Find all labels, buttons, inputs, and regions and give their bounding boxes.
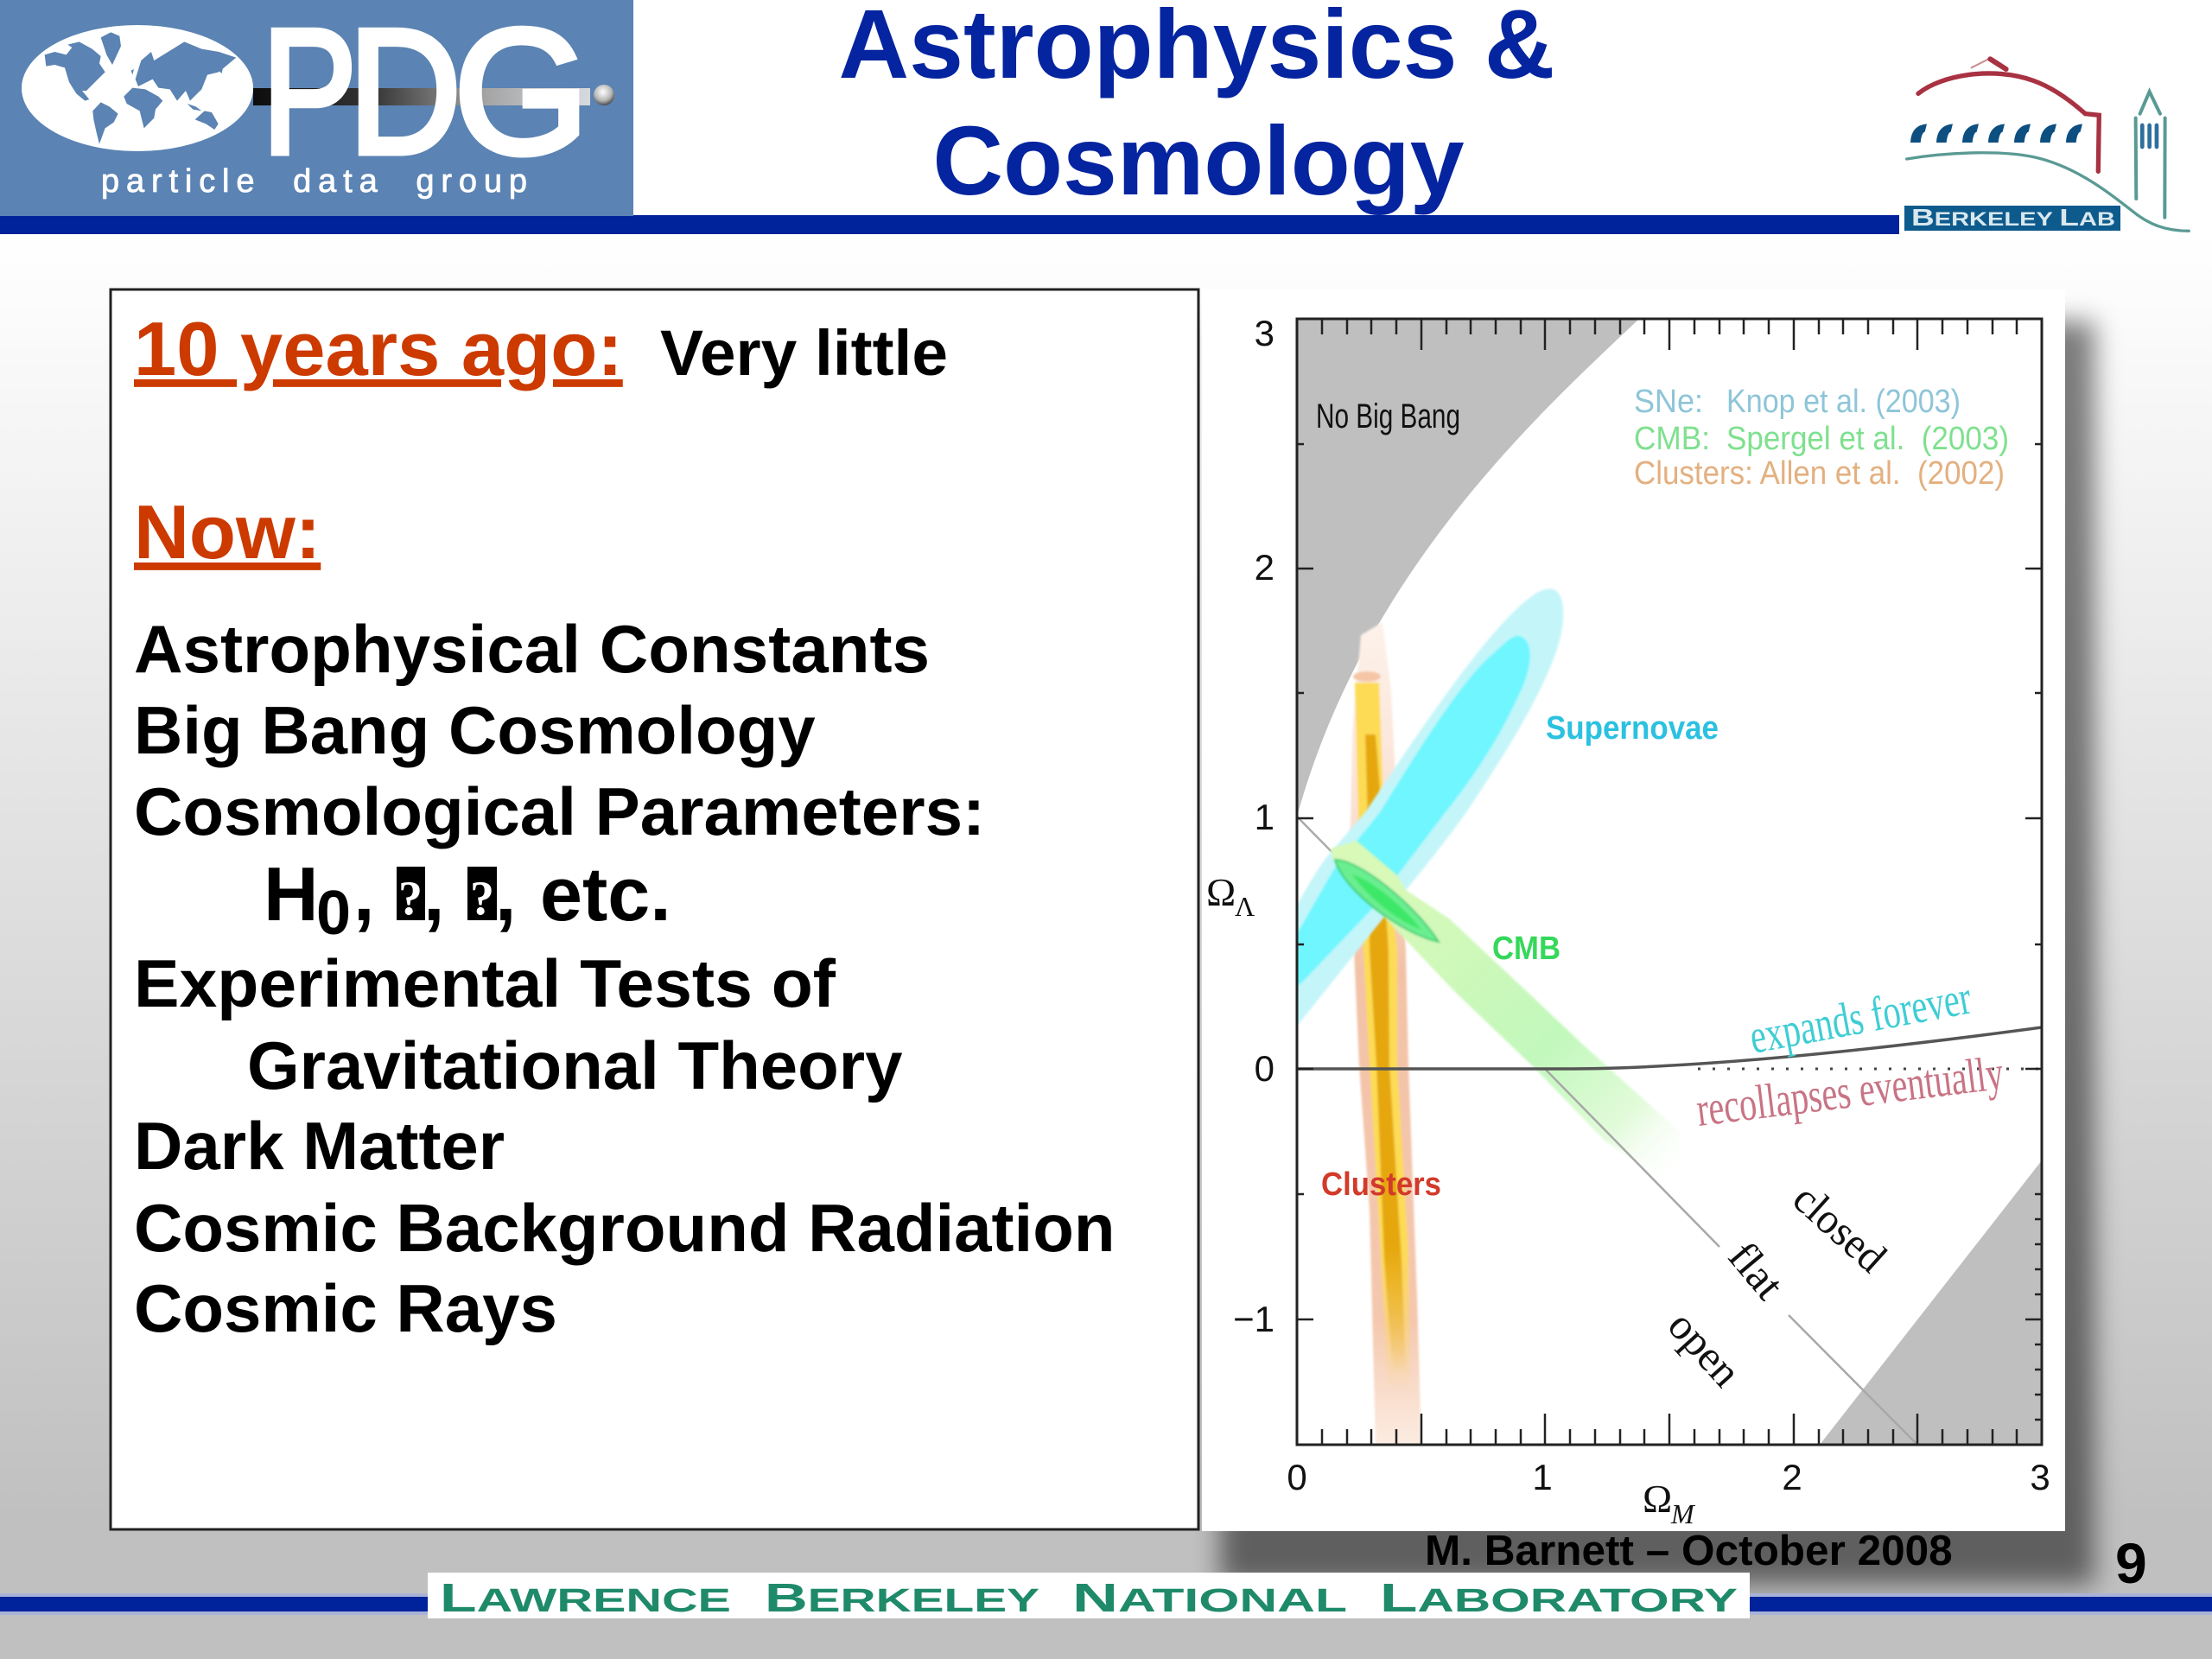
y axis labels: −1 bbox=[1233, 1299, 1274, 1339]
legend: Spergel et al. (2003) bbox=[1726, 421, 2009, 457]
topic list text: Gravitational Theory bbox=[247, 1027, 903, 1103]
x axis title bbox=[1643, 1477, 1696, 1529]
PDG letters bbox=[262, 0, 589, 191]
x axis labels: 0 bbox=[1287, 1457, 1307, 1497]
legend: Clusters: Allen et al. (2002) bbox=[1634, 455, 2005, 492]
x axis labels: 3 bbox=[2030, 1457, 2050, 1497]
y axis title: Λ bbox=[1235, 891, 1255, 922]
label: recollapses eventually: recollapses eventually bbox=[1694, 1046, 2006, 1137]
header bar bbox=[0, 215, 1899, 234]
footer banner: Lawrence Berkeley National Laboratory: B ERKELEY bbox=[765, 1575, 1039, 1620]
title: Cosmology bbox=[932, 106, 1465, 215]
logo: particle data group bbox=[0, 0, 633, 216]
y axis labels: 1 bbox=[1255, 797, 1274, 837]
topic list text bbox=[134, 611, 1115, 1346]
particle data group caption: particle data group bbox=[101, 163, 527, 200]
x axis labels: 2 bbox=[1782, 1457, 1802, 1497]
cosmological parameters line: , bbox=[495, 851, 516, 937]
footer banner: Lawrence Berkeley National Laboratory: L ABORATORY bbox=[1380, 1575, 1738, 1620]
contour: CMB bbox=[1331, 841, 1685, 1180]
label: open: open bbox=[1659, 1301, 1751, 1395]
y axis title: Ω bbox=[1206, 870, 1236, 914]
label: expands forever: expands forever bbox=[1745, 971, 1975, 1065]
cosmological parameters line: ? bbox=[398, 872, 423, 925]
legend bbox=[1634, 384, 2009, 492]
region: lower right grey bbox=[1820, 1160, 2042, 1445]
plot regions bbox=[1292, 319, 2042, 1445]
panel: topic list bbox=[111, 289, 1198, 1529]
particle beam bbox=[253, 85, 614, 105]
label: CMB: CMB bbox=[1492, 931, 1560, 967]
x axis title: M bbox=[1670, 1498, 1696, 1529]
cosmological parameters line: etc. bbox=[540, 851, 671, 937]
page number: 9 bbox=[2115, 1531, 2147, 1595]
footer bar bbox=[0, 1593, 2212, 1615]
contour: supernovae bbox=[1292, 588, 1563, 1033]
region: no big bang bbox=[1297, 319, 1639, 817]
heading: 10 years ago: 10 years ago: bbox=[134, 306, 623, 391]
topic list text: Astrophysical Constants bbox=[134, 611, 930, 687]
cosmological parameters line: , bbox=[423, 851, 444, 937]
y axis title bbox=[1206, 870, 1255, 922]
topic list text: Cosmic Rays bbox=[134, 1270, 557, 1346]
heading: now: Now: bbox=[134, 489, 321, 575]
plot axes and ticks bbox=[1297, 319, 2042, 1445]
cosmological parameters line bbox=[264, 851, 671, 948]
cosmological parameters line: 0 bbox=[316, 879, 351, 948]
cosmological parameters line: ? bbox=[470, 872, 494, 925]
legend: CMB: bbox=[1634, 421, 1710, 457]
topic list text: Experimental Tests of bbox=[134, 945, 836, 1021]
topic list text: Cosmological Parameters: bbox=[134, 773, 985, 849]
expansion boundary curve bbox=[1297, 1027, 2042, 1069]
y axis labels: 2 bbox=[1255, 547, 1274, 588]
footer banner: Lawrence Berkeley National Laboratory: N ATIONAL bbox=[1072, 1575, 1347, 1620]
logo: Berkeley Lab: B ERKELEY LAB bbox=[1911, 204, 2115, 231]
y axis labels: 3 bbox=[1255, 313, 1274, 353]
y axis labels: 0 bbox=[1255, 1048, 1274, 1089]
footer banner: Lawrence Berkeley National Laboratory bbox=[428, 1573, 1750, 1620]
footer banner: Lawrence Berkeley National Laboratory: L AWRENCE bbox=[440, 1575, 731, 1620]
author credit: M. Barnett – October 2008 bbox=[1425, 1527, 1953, 1574]
text: very little: Very little bbox=[660, 316, 948, 389]
topic list text: Cosmic Background Radiation bbox=[134, 1190, 1115, 1266]
contour: clusters bbox=[1350, 622, 1421, 1445]
legend: Knop et al. (2003) bbox=[1726, 384, 1961, 420]
panel: cosmology plot bbox=[1202, 289, 2065, 1531]
label: closed: closed bbox=[1784, 1174, 1896, 1281]
topic list text: Dark Matter bbox=[134, 1108, 505, 1184]
label: supernovae: Supernovae bbox=[1546, 710, 1719, 747]
flat universe line upper bbox=[1298, 816, 1332, 853]
x axis labels: 1 bbox=[1532, 1457, 1553, 1497]
flat universe line lower bbox=[1545, 1069, 1917, 1445]
topic list text: Big Bang Cosmology bbox=[134, 692, 816, 768]
logo: Berkeley Lab bbox=[1904, 58, 2189, 231]
label: flat: flat bbox=[1719, 1232, 1794, 1308]
legend: SNe: bbox=[1634, 384, 1703, 420]
x axis title: Ω bbox=[1643, 1477, 1672, 1521]
label: no big bang: No Big Bang bbox=[1316, 397, 1460, 435]
y axis labels bbox=[1233, 313, 1274, 1339]
label: clusters: Clusters bbox=[1321, 1166, 1441, 1203]
cosmological parameters line: , bbox=[353, 851, 374, 937]
x axis labels bbox=[1287, 1457, 2050, 1497]
icon: world map globe bbox=[22, 25, 253, 151]
plot drop shadow bbox=[1220, 321, 2094, 1585]
cosmological parameters line: H bbox=[264, 851, 319, 937]
title bbox=[839, 0, 1554, 215]
